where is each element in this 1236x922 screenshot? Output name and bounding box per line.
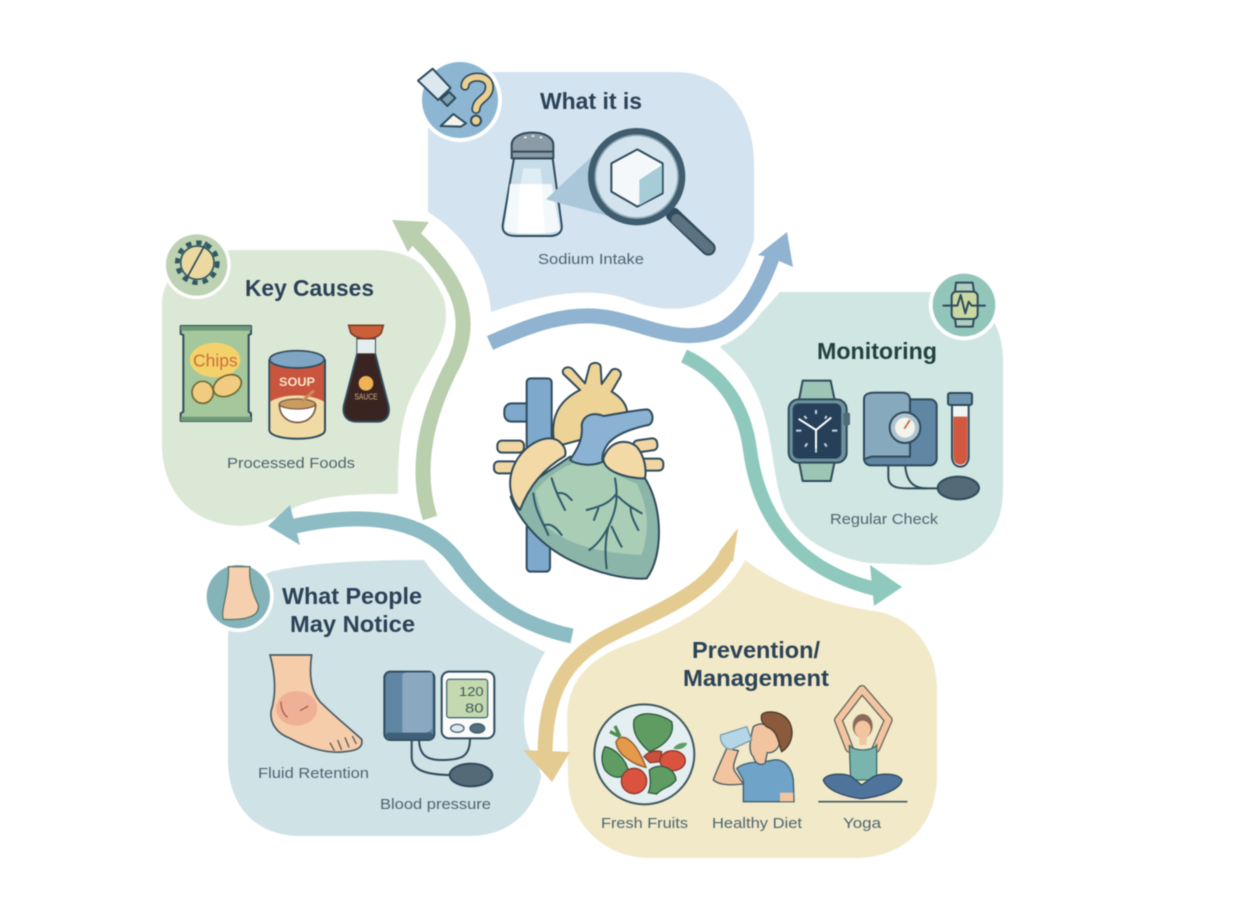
arrow: yellow to what people may notice (523, 528, 738, 782)
what people may notice heading: What People (282, 583, 422, 609)
sodium intake caption: Sodium Intake (538, 251, 644, 268)
icon: person drinking water (713, 712, 794, 802)
monitoring background (720, 292, 1003, 565)
icon: magnifier with salt crystal (546, 131, 708, 248)
arrow: green to what it is (392, 220, 463, 518)
yoga caption: Yoga (843, 815, 882, 832)
aorta (553, 363, 627, 447)
icon: sauce bottle: SAUCE (354, 392, 378, 401)
panel: key causes (162, 231, 446, 526)
prevention illustrations (594, 689, 907, 804)
arrow: blue from center to monitoring (490, 226, 799, 343)
what people may notice heading: May Notice (290, 611, 415, 637)
icon: blood pressure monitor: 80 (465, 701, 484, 716)
right atrium (603, 442, 646, 478)
coronary vessels (533, 478, 642, 568)
prevention heading (683, 637, 829, 691)
vena cava (504, 378, 552, 572)
key causes background (162, 250, 446, 526)
ventricles (511, 457, 659, 579)
what people may notice heading (282, 583, 422, 637)
healthy diet caption: Healthy Diet (712, 815, 803, 832)
arrow: teal blue to key causes (268, 505, 572, 636)
prevention heading: Management (683, 665, 829, 691)
icon: blood pressure monitor (384, 672, 494, 786)
fluid retention caption: Fluid Retention (258, 765, 369, 782)
icon: swollen foot (270, 655, 362, 752)
icon: smartwatch (789, 381, 850, 481)
arrow: teal to prevention (684, 356, 902, 606)
regular check caption: Regular Check (830, 511, 939, 528)
icon: soup can (269, 351, 325, 439)
icon: blood pressure cuff and gauge (864, 393, 979, 499)
panel: what people may notice (203, 560, 545, 836)
blood pressure caption: Blood pressure (380, 796, 491, 813)
pulmonary veins (494, 438, 663, 473)
panel: what it is (418, 58, 754, 312)
pulmonary artery (570, 409, 653, 465)
icon: soup can: SOUP (279, 375, 315, 389)
key causes illustrations (163, 231, 389, 439)
prevention background (567, 560, 937, 858)
icon: yoga pose (818, 689, 907, 802)
icon: blood pressure monitor: 120 (459, 684, 484, 699)
what people may notice illustrations (203, 561, 494, 786)
what it is illustrations (418, 58, 708, 248)
fresh fruits caption: Fresh Fruits (601, 815, 688, 832)
panel: monitoring (720, 270, 1003, 565)
monitoring heading: Monitoring (817, 338, 937, 364)
prevention heading: Prevention/ (692, 637, 821, 663)
icon: plate of vegetables (594, 704, 694, 804)
icon: badge smartwatch pulse (929, 270, 999, 340)
icon: test tube (948, 393, 972, 467)
icon: sauce bottle (344, 325, 389, 422)
key causes heading: Key Causes (245, 275, 374, 301)
icon: central heart (494, 363, 663, 579)
left atrium (510, 438, 565, 510)
icon: badge gear (163, 231, 231, 299)
monitoring illustrations (789, 270, 999, 499)
ventricle highlight (535, 463, 647, 555)
what it is background (428, 72, 754, 312)
icon: chips bag: Chips (193, 351, 238, 371)
icon: badge salt and question mark (418, 58, 502, 142)
what it is heading: What it is (540, 88, 642, 114)
icon: chips bag (181, 326, 251, 421)
icon: salt shaker (503, 132, 562, 236)
panel: prevention and management (567, 560, 937, 858)
processed foods caption: Processed Foods (227, 455, 355, 472)
icon: badge foot (203, 561, 274, 632)
what people may notice background (228, 560, 545, 836)
